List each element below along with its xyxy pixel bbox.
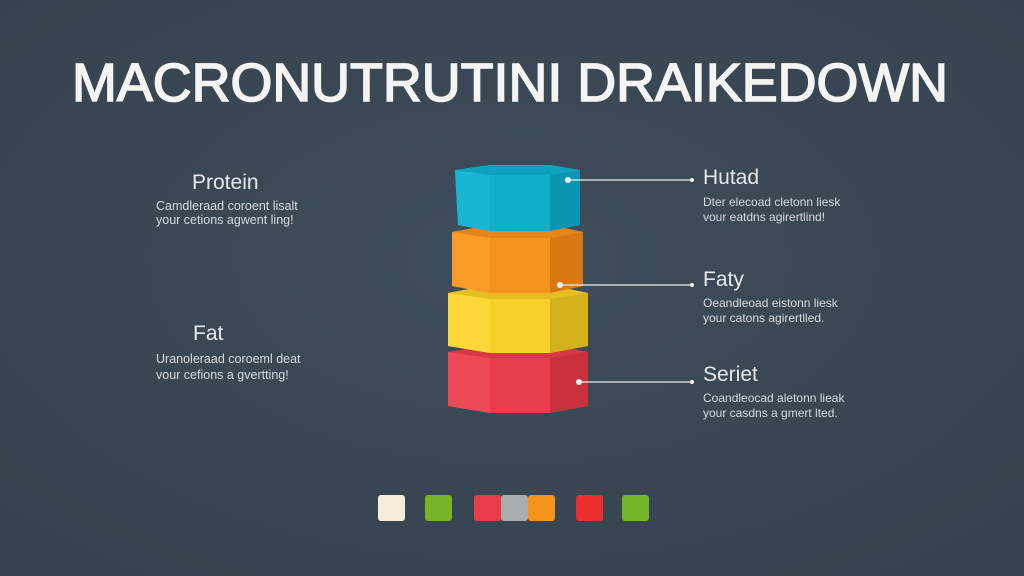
text block: protein: your cetions agwent ling! (156, 213, 294, 227)
text block: hutad: Dter elecoad cletonn liesk (703, 195, 841, 209)
text block: faty (703, 268, 839, 325)
block: orange (452, 225, 583, 293)
text block: protein: Protein (192, 171, 259, 194)
block: yellow (448, 285, 588, 353)
text block: faty: Faty (703, 268, 744, 291)
text block: faty: Oeandleoad eistonn liesk (703, 296, 839, 310)
connector lines (557, 177, 694, 385)
stacked hexagon chart (448, 165, 588, 413)
text block: seriet: your casdns a gmert lted. (703, 406, 838, 420)
text block: hutad (703, 166, 841, 224)
text block: seriet: Coandleocad aletonn lieak (703, 391, 845, 405)
text block: seriet (703, 363, 845, 420)
text block: fat: Fat (193, 322, 224, 345)
text block: protein: Camdleraad coroent lisalt (156, 199, 298, 213)
text block: fat: vour cefions a gvertting! (156, 368, 289, 382)
title: MACRONUTRUTINI DRAIKEDOWN (72, 53, 948, 113)
block: red (448, 345, 588, 413)
block: blue (455, 165, 580, 231)
text block: fat: Uranoleraad coroeml deat (156, 352, 301, 366)
text block: seriet: Seriet (703, 363, 758, 386)
text block: faty: your catons agirertlled. (703, 311, 824, 325)
text block: hutad: vour eatdns agirertlind! (703, 210, 825, 224)
legend swatches (378, 495, 649, 521)
text block: hutad: Hutad (703, 166, 759, 189)
text block: protein (156, 171, 298, 227)
text block: fat (156, 322, 301, 382)
